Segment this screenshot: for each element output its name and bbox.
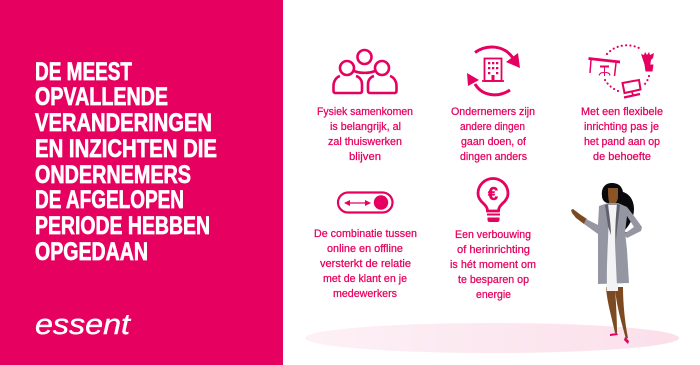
- coat: [584, 203, 642, 284]
- text: fysiek samenkomen: [317, 106, 413, 163]
- text: verbouwing: Een verbouwing: [455, 229, 531, 241]
- text: ondernemers: andere dingen: [460, 121, 525, 133]
- logo: essent: essent: [35, 309, 132, 341]
- text: verbouwing: is hét moment om: [450, 259, 536, 271]
- skin: legs, face, hands: [606, 287, 628, 339]
- text: verbouwing: te besparen op: [458, 274, 529, 286]
- text: flexibele inrichting: inrichting pas je: [584, 121, 659, 133]
- dress: [607, 205, 617, 287]
- icon: light bulb with euro: €: [488, 184, 498, 204]
- text: combinatie online offline: met de klant en je: [323, 273, 407, 285]
- text: flexibele inrichting: het pand aan op: [584, 136, 660, 148]
- text: flexibele inrichting: de behoefte: [593, 151, 651, 163]
- icon: building with circular arrows: [467, 47, 520, 95]
- panel: pink sidebar: [0, 0, 283, 365]
- lapels: [605, 204, 620, 240]
- text: verbouwing: [450, 229, 536, 301]
- text: ondernemers: dingen anders: [460, 151, 527, 163]
- icon: toggle switch: [338, 192, 392, 212]
- heading: DE MEEST: [35, 58, 132, 86]
- text: ondernemers: [451, 106, 535, 163]
- shoes: [610, 333, 629, 344]
- text: verbouwing: of herinrichting: [457, 244, 530, 256]
- heading: OPVALLENDE: [35, 83, 168, 111]
- icon: people: [334, 50, 396, 93]
- heading: ONDERNEMERS: [35, 161, 191, 189]
- text: verbouwing: energie: [476, 289, 511, 301]
- text: flexibele inrichting: Met een flexibele: [581, 106, 663, 118]
- heading: PERIODE HEBBEN: [35, 212, 210, 240]
- text: combinatie online offline: De combinatie tussen: [314, 228, 417, 240]
- text: fysiek samenkomen: Fysiek samenkomen: [317, 106, 413, 118]
- heading: EN INZICHTEN DIE: [35, 135, 217, 163]
- heading: [35, 58, 217, 266]
- text: combinatie online offline: [314, 228, 417, 300]
- text: fysiek samenkomen: blijven: [349, 151, 381, 163]
- text: flexibele inrichting: [581, 106, 663, 163]
- icon: flexible furniture: [588, 45, 654, 98]
- text: combinatie online offline: medewerkers: [333, 288, 397, 300]
- text: fysiek samenkomen: zal thuiswerken: [328, 136, 402, 148]
- heading: DE AFGELOPEN: [35, 186, 184, 214]
- text: combinatie online offline: online en offline: [327, 243, 403, 255]
- text: combinatie online offline: versterkt de relatie: [320, 258, 411, 270]
- hair: [602, 183, 634, 231]
- text: ondernemers: Ondernemers zijn: [451, 106, 535, 118]
- floor ellipse: [305, 323, 679, 353]
- heading: VERANDERINGEN: [35, 109, 212, 137]
- text: fysiek samenkomen: is belangrijk, al: [330, 121, 401, 133]
- text: ondernemers: gaan doen, of: [461, 136, 527, 148]
- heading: OPGEDAAN: [35, 238, 148, 266]
- illustration: woman: [571, 183, 642, 344]
- icon: light bulb with euro: [478, 179, 508, 222]
